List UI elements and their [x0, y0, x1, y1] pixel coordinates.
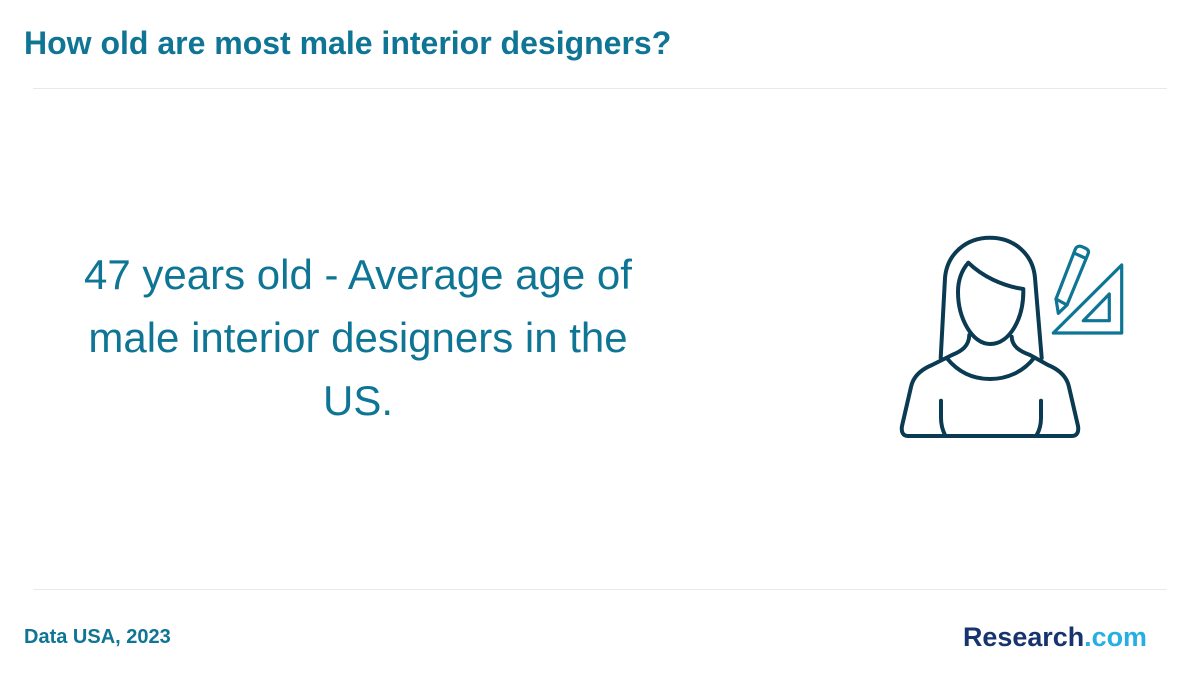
main statistic text: US. [323, 377, 393, 424]
title: How old are most male interior designers? [24, 25, 671, 61]
main statistic text: 47 years old - Average age of [84, 251, 632, 298]
icon: pencil and set square [1053, 246, 1122, 333]
logo: Research.com: Research.com [963, 622, 1147, 652]
main statistic text: male interior designers in the [88, 314, 628, 361]
source note: Data USA, 2023 [24, 626, 171, 648]
icon: person [902, 238, 1078, 436]
main statistic text [84, 251, 632, 424]
